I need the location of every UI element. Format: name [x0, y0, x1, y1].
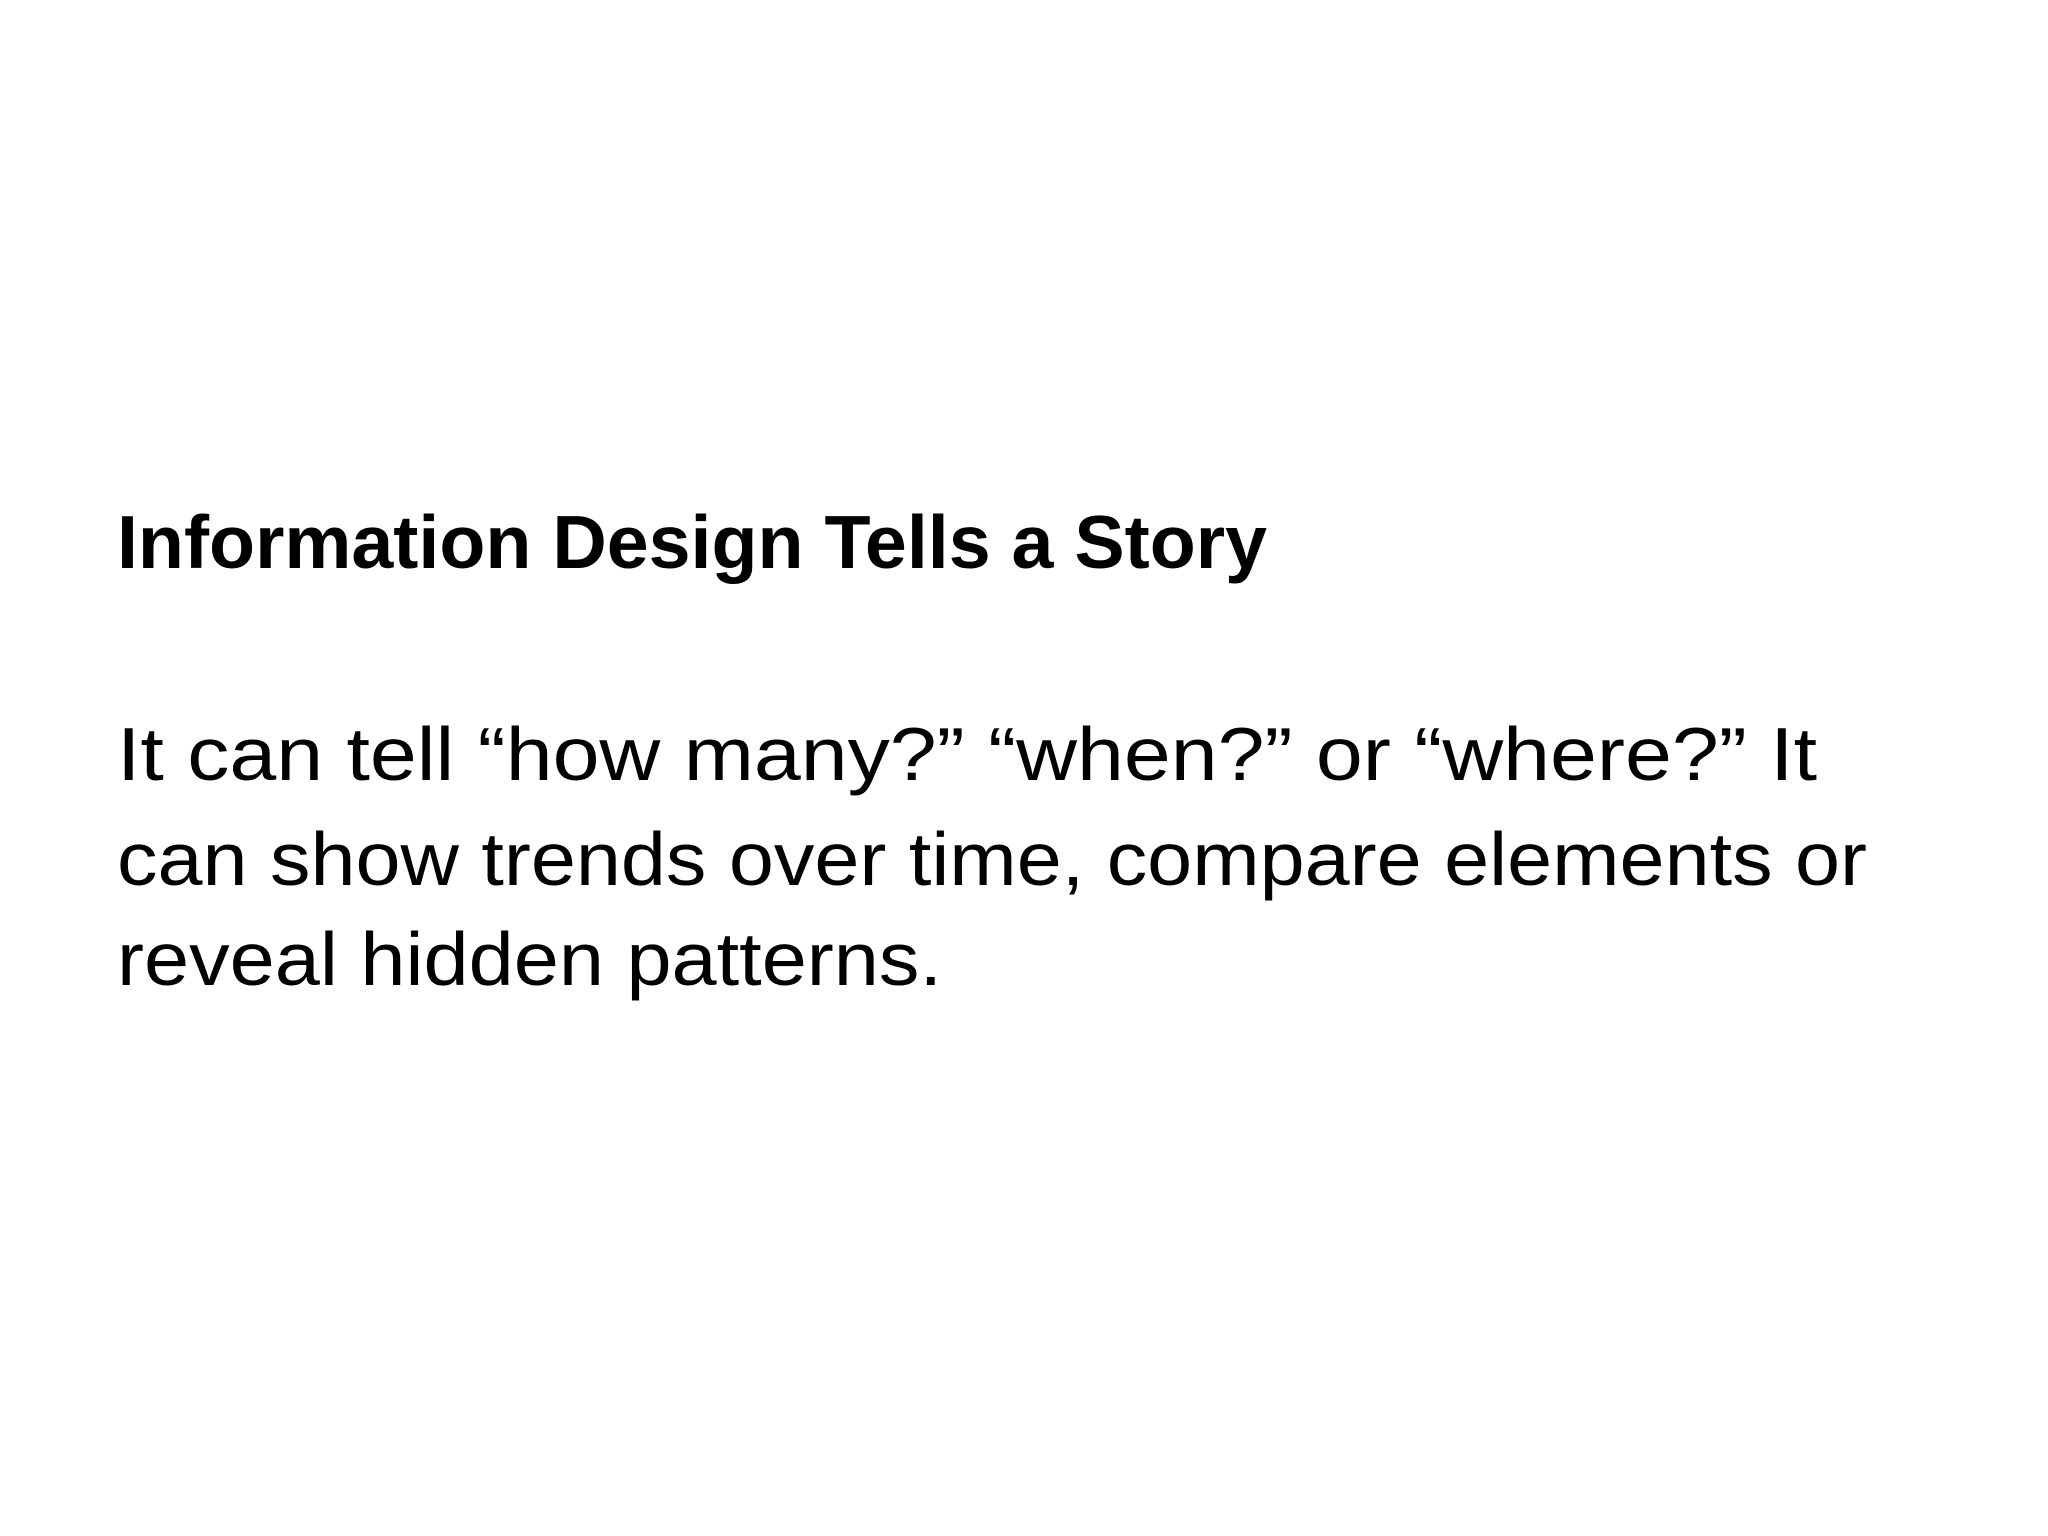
- title: Information Design Tells a Story: [117, 500, 1267, 584]
- text block: body description: can show trends over time, compare elements or: [117, 817, 1867, 901]
- text block: body description: reveal hidden patterns.: [117, 917, 942, 1001]
- text block: body description: [117, 712, 1867, 1001]
- text block: body description: It can tell “how many?” “when?” or “where?” It: [117, 712, 1817, 796]
